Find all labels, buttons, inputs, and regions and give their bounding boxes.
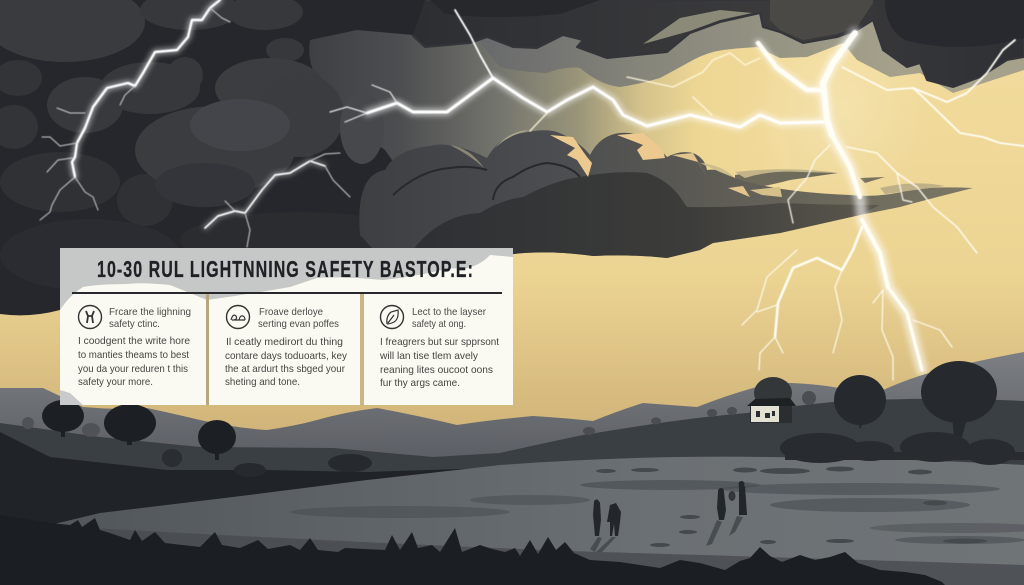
field lower shade	[90, 528, 1024, 585]
grey cloud band under top clouds	[470, 0, 1024, 93]
dark left storm cloud mass	[0, 0, 540, 315]
card 1 heading: Frcare the lighning	[109, 306, 191, 318]
card 2 heading: Froave derloye	[259, 306, 323, 318]
title: 10-30 RUL LIGHTNNING SAFETY BASTOP.E:	[97, 256, 474, 282]
lit storm haze behind the clouds	[300, 15, 790, 215]
farmhouse	[747, 398, 796, 423]
card 1 heading: safety ctinc.	[109, 318, 160, 330]
lower long cloud bank	[359, 130, 973, 278]
field grass patches	[290, 466, 1024, 547]
field	[50, 457, 1024, 585]
icon: shelter	[226, 306, 250, 328]
card 2 heading: serting evan poffes	[258, 318, 339, 330]
panel translucent cloud tint	[60, 248, 513, 310]
card 1	[78, 306, 191, 388]
card 1 body: to manties theams to best	[78, 349, 189, 361]
glow around main bolt	[750, 10, 930, 210]
dark left slope	[0, 432, 520, 560]
card 3 body: I freagrers but sur spprsont	[380, 336, 499, 348]
sky background	[0, 0, 1024, 440]
panel: 10-30 rule lightning safety	[60, 248, 513, 405]
lightning bolt: lower left	[205, 153, 350, 247]
card 2	[225, 306, 348, 388]
card 1 body: I coodgent the write hore	[78, 335, 190, 347]
sunlit cloud tops	[450, 130, 945, 197]
card 1 body: you da your reduren t this	[78, 363, 188, 375]
icon: lightning rod	[78, 306, 102, 328]
card 3 heading: safety at ong.	[412, 318, 466, 330]
lightning bolt: horizontal centre	[330, 10, 823, 131]
lightning bolt: main strike	[742, 33, 1024, 380]
card 2 body: sheting and tone.	[225, 376, 300, 388]
foreground grass	[0, 515, 945, 585]
card 1 body: safety your more.	[78, 376, 153, 388]
far hills	[0, 352, 1024, 480]
card 3 heading: Lect to the layser	[412, 306, 486, 318]
card 2 body: the at ardurt ths sbged your	[225, 363, 345, 375]
middle hill	[0, 399, 1024, 500]
panel cream cards	[60, 248, 513, 405]
card 3	[379, 306, 499, 389]
panel lower left hill tint	[60, 390, 83, 405]
lightning bolt: upper left	[40, 0, 230, 220]
trees and shrubs on left slope	[22, 400, 372, 477]
card 3 body: fur thy args came.	[380, 377, 460, 389]
card 2 body: Il ceatly medirort du thing	[226, 336, 343, 348]
card 3 body: reaning lites oucoot oons	[380, 364, 493, 376]
icon: leaf shield	[380, 306, 404, 328]
card 3 body: will lan tise tlem avely	[379, 350, 479, 362]
lightning bolts glow	[72, 0, 922, 370]
card 2 body: contare days toduoarts, key	[225, 350, 348, 362]
trees on right hill	[583, 361, 997, 437]
title rule	[72, 292, 502, 294]
column gaps	[206, 294, 364, 405]
bushes along field edge	[780, 432, 1024, 465]
people and shadows	[590, 481, 747, 552]
upper storm cloud	[410, 0, 1024, 87]
